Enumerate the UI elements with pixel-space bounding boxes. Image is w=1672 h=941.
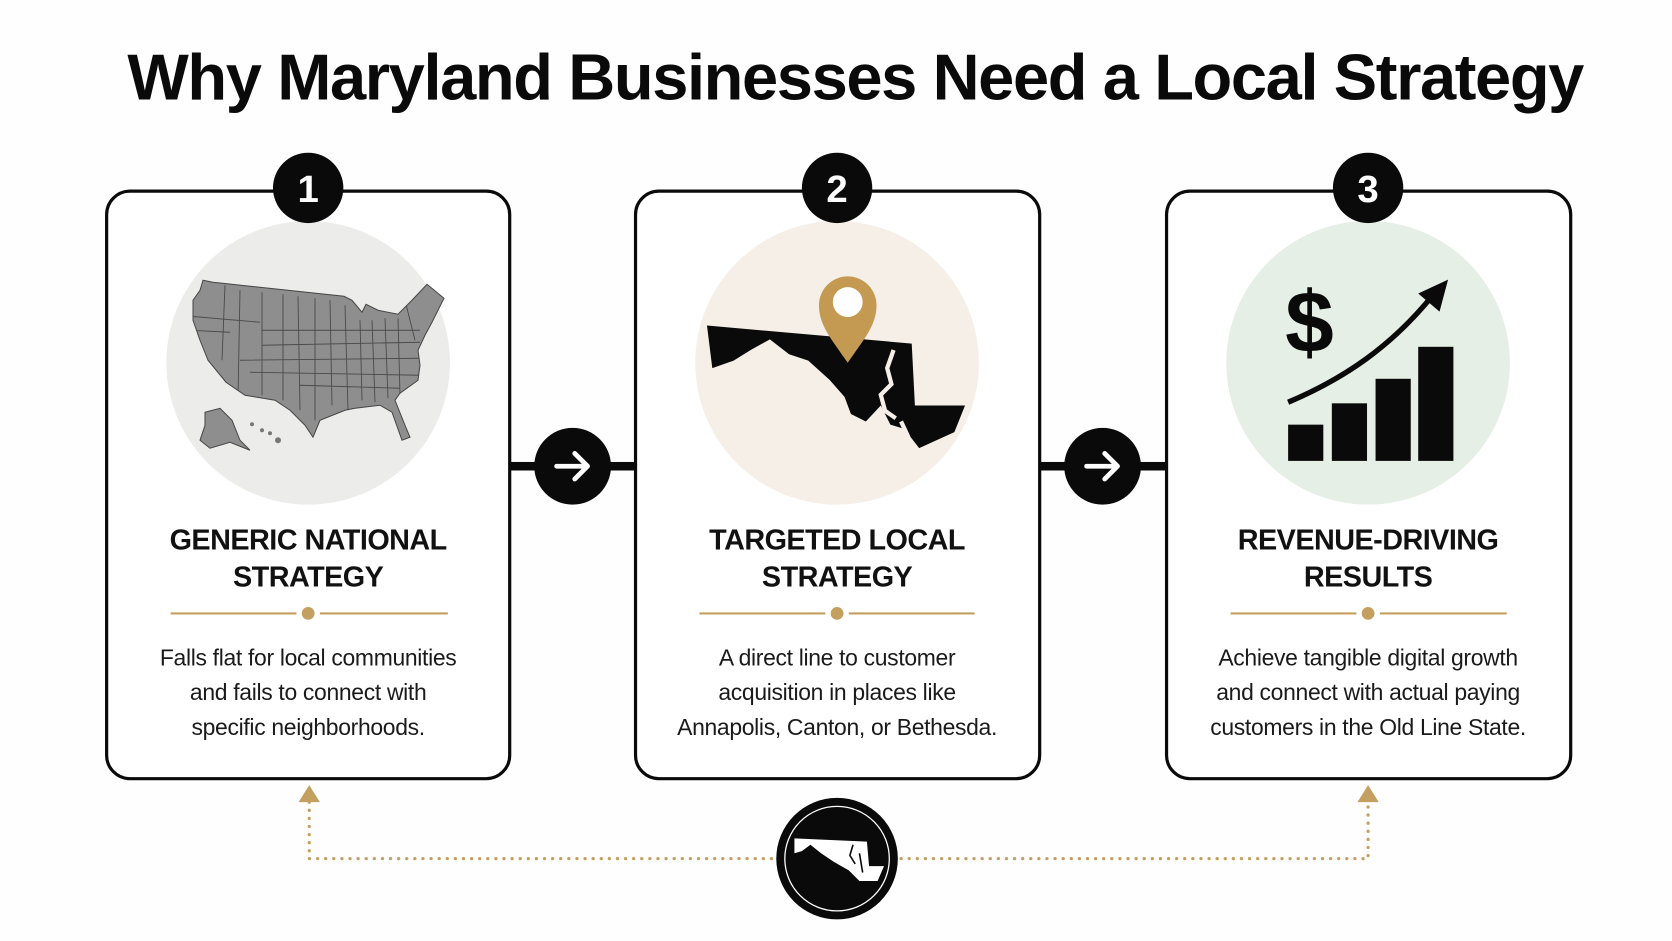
body text: specific neighborhoods. [192, 714, 425, 740]
number badge 1: 1 [297, 168, 319, 211]
divider [171, 607, 448, 620]
panel: generic national strategy: STRATEGY [233, 562, 384, 594]
panel: revenue-driving results: RESULTS [1304, 562, 1433, 594]
body text: Annapolis, Canton, or Bethesda. [677, 714, 997, 740]
dotted feedback loop [299, 785, 1379, 859]
image circle: growth chart: $ [1285, 273, 1334, 371]
body text: and fails to connect with [190, 679, 426, 705]
panel: generic national strategy [107, 191, 510, 779]
icon: Maryland emblem [776, 798, 898, 919]
heading: GENERIC NATIONAL [170, 524, 447, 556]
body text: Achieve tangible digital growth [1218, 645, 1518, 671]
number badge 2: 2 [826, 168, 848, 211]
body text: acquisition in places like [718, 679, 956, 705]
body text: and connect with actual paying [1216, 679, 1520, 705]
panel: revenue-driving results [1167, 191, 1571, 779]
number badge 1 [273, 153, 343, 223]
image circle: Maryland with pin [695, 221, 979, 505]
body text: A direct line to customer [719, 645, 956, 671]
panel: targeted local strategy: STRATEGY [762, 562, 913, 594]
panel: targeted local strategy [636, 191, 1040, 779]
divider [700, 607, 975, 620]
image circle: growth chart [1226, 221, 1510, 505]
arrow: step 1 to 2 [534, 428, 611, 505]
number badge 3 [1333, 153, 1403, 223]
body text: customers in the Old Line State. [1210, 714, 1526, 740]
heading: TARGETED LOCAL [709, 524, 965, 556]
title: Why Maryland Businesses Need a Local Strategy [127, 40, 1584, 113]
divider [1231, 607, 1507, 620]
number badge 3: 3 [1357, 168, 1379, 211]
image circle: US map [166, 221, 450, 505]
connector line: card1 to card2 [510, 462, 1168, 470]
body text: Falls flat for local communities [160, 645, 456, 671]
arrow: step 2 to 3 [1064, 428, 1141, 505]
number badge 2 [802, 153, 872, 223]
heading: REVENUE-DRIVING [1238, 524, 1498, 556]
